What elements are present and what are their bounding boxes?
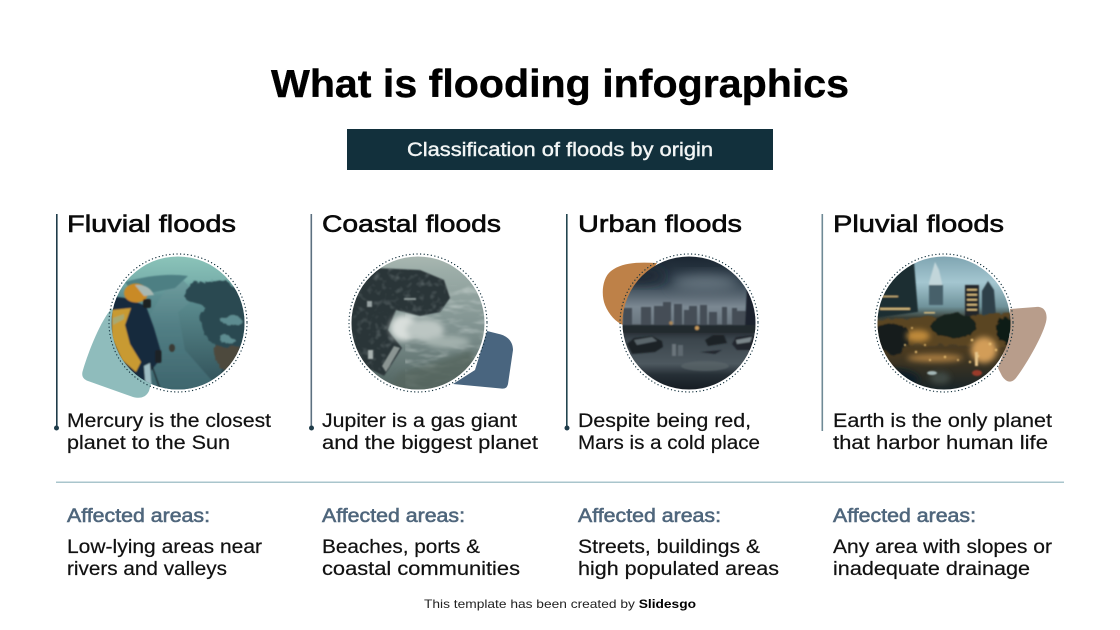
affected areas: pluvial xyxy=(833,506,1053,580)
blob: ochre xyxy=(603,263,657,325)
photo: flooded city with cars xyxy=(615,255,758,391)
heading: fluvial floods: Fluvial floods xyxy=(67,211,236,238)
heading: urban floods: Urban floods xyxy=(578,211,742,238)
photo: storm surge at coast xyxy=(352,256,484,390)
timeline line and dot: urban xyxy=(564,214,570,430)
dotted ring: coastal xyxy=(349,254,487,392)
description: fluvial xyxy=(67,411,272,454)
timeline line: pluvial xyxy=(822,214,823,431)
panel: fluvial floods xyxy=(54,211,272,454)
affected areas: urban: high populated areas xyxy=(578,559,779,580)
affected areas: fluvial xyxy=(67,506,263,580)
affected areas: fluvial: Affected areas: xyxy=(67,506,210,527)
affected areas: coastal xyxy=(322,506,520,580)
heading: pluvial floods: Pluvial floods xyxy=(833,211,1004,238)
subtitle banner xyxy=(347,129,773,170)
photo: rainy city at night xyxy=(878,256,1010,390)
blob: navy xyxy=(453,331,513,389)
affected areas: urban: Affected areas: xyxy=(578,506,721,527)
dotted ring: fluvial xyxy=(109,254,247,392)
affected areas: coastal: Beaches, ports & xyxy=(322,537,480,558)
description: pluvial: Earth is the only planet xyxy=(833,411,1053,432)
blob: taupe xyxy=(998,307,1047,382)
affected areas: coastal: coastal communities xyxy=(322,559,520,580)
description: urban xyxy=(578,411,760,454)
affected areas: pluvial: inadequate drainage xyxy=(833,559,1030,580)
description: coastal: and the biggest planet xyxy=(322,433,539,454)
affected areas: urban xyxy=(578,506,779,580)
affected areas: fluvial: Low-lying areas near xyxy=(67,537,263,558)
affected areas: pluvial: Affected areas: xyxy=(833,506,976,527)
heading: coastal floods: Coastal floods xyxy=(322,211,501,238)
affected areas: urban: Streets, buildings & xyxy=(578,537,760,558)
description: fluvial: planet to the Sun xyxy=(67,433,230,454)
affected areas: pluvial: Any area with slopes or xyxy=(833,537,1053,558)
description: fluvial: Mercury is the closest xyxy=(67,411,272,432)
panel: coastal floods xyxy=(309,211,539,454)
affected areas: coastal: Affected areas: xyxy=(322,506,465,527)
footer credit: This template has been created by Slidesgo xyxy=(424,597,696,611)
blob: teal xyxy=(82,308,151,398)
description: urban: Mars is a cold place xyxy=(578,433,760,454)
photo: firefighter over river xyxy=(112,256,244,390)
description: coastal xyxy=(322,411,539,454)
dotted ring: pluvial xyxy=(875,254,1013,392)
panel: urban floods xyxy=(564,211,760,454)
timeline line and dot: coastal xyxy=(309,214,314,430)
description: pluvial: that harbor human life xyxy=(833,433,1048,454)
dotted ring: urban xyxy=(620,254,758,392)
timeline line and dot: fluvial xyxy=(54,214,59,430)
affected areas: fluvial: rivers and valleys xyxy=(67,559,227,580)
panel: pluvial floods xyxy=(822,211,1053,454)
title: What is flooding infographics xyxy=(271,63,849,106)
description: coastal: Jupiter is a gas giant xyxy=(322,411,518,432)
description: pluvial xyxy=(833,411,1053,454)
description: urban: Despite being red, xyxy=(578,411,751,432)
subtitle banner: Classification of floods by origin xyxy=(407,139,713,161)
